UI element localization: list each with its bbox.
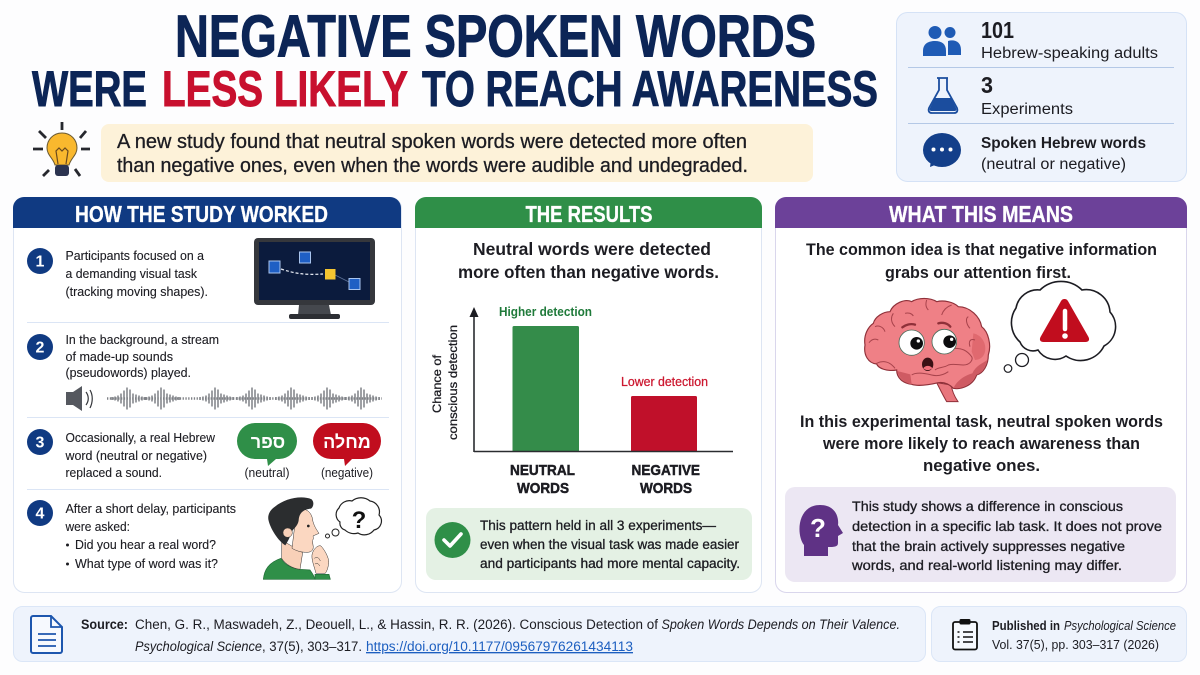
stat: experiments: [981, 72, 1073, 118]
icon: cartoon brain: [865, 298, 990, 402]
icon: document: [31, 616, 62, 653]
step 1: a demanding visual task: [66, 266, 197, 281]
step 2: of made-up sounds: [66, 349, 173, 364]
step 2: 2: [36, 340, 45, 356]
callout: replication: This pattern held in all 3 experiments—: [480, 518, 716, 533]
icon: speech bubble: [923, 133, 961, 167]
icon: thinking person: [263, 497, 330, 579]
experimental finding statement: [800, 413, 1163, 475]
title: [32, 4, 878, 117]
bar labels: NEUTRAL: [510, 462, 575, 479]
step 2: [27, 332, 382, 411]
step 1: [27, 238, 375, 319]
stat: experiments: Experiments: [981, 101, 1073, 118]
icon: head with question mark: [799, 505, 843, 556]
y axis title: Chance of: [430, 354, 444, 413]
bar labels: WORDS: [517, 480, 569, 497]
citation text: https://doi.org/10.1177/09567976261434113: [366, 639, 633, 654]
common idea statement: The common idea is that negative information: [806, 241, 1157, 259]
common idea statement: grabs our attention first.: [885, 264, 1071, 282]
icon: check mark: [434, 522, 470, 558]
step 3: word (neutral or negative): [65, 448, 207, 463]
icon: flask: [929, 78, 957, 113]
heading: the results: [415, 197, 762, 228]
negative word bubble: [313, 423, 381, 480]
neutral word bubble: ספר: [251, 432, 285, 452]
citation text: Spoken Words Depends on Their Valence.: [662, 617, 900, 632]
stat: participants: Hebrew-speaking adults: [981, 45, 1158, 62]
heading: what this means: [775, 197, 1187, 228]
citation text: [81, 617, 900, 654]
stat: experiments: 3: [981, 72, 993, 98]
bar labels: NEGATIVE: [632, 462, 700, 479]
heading: how the study worked: HOW THE STUDY WORKED: [75, 201, 328, 227]
citation text: Source:: [81, 617, 128, 632]
callout: caveat: that the brain actively suppresses negative: [852, 538, 1125, 554]
callout: caveat: words, and real-world listening may differ.: [851, 557, 1122, 573]
callout: summary: [101, 124, 813, 182]
axis arrow: [470, 307, 478, 317]
callout: replication: [426, 508, 752, 580]
step 1: (tracking moving shapes).: [66, 284, 208, 299]
publication text: Vol. 37(5), pp. 303–317 (2026): [992, 638, 1159, 652]
callout: summary: than negative ones, even when the words were audible and undegraded.: [117, 155, 748, 177]
step 4: [27, 497, 381, 579]
y axis title: conscious detection: [446, 325, 460, 440]
icon: clipboard: [953, 619, 977, 650]
waveform: [107, 388, 382, 410]
publication text: Psychological Science: [1064, 619, 1176, 633]
bar labels: WORDS: [640, 480, 692, 497]
neutral bar: Higher detection: [499, 305, 592, 319]
publication text: [992, 619, 1176, 652]
callout: caveat: [785, 487, 1176, 582]
icon: monitor with tracking task: [254, 238, 375, 319]
step 4: 4: [36, 506, 45, 522]
panel: the results: [415, 197, 762, 592]
panel: how the study worked: [13, 197, 402, 592]
icon: thought bubble with warning: [1004, 281, 1116, 372]
citation text: Psychological Science: [135, 639, 262, 654]
step 1: Participants focused on a: [66, 248, 205, 263]
heading: how the study worked: [13, 197, 401, 228]
step 4: After a short delay, participants: [66, 501, 236, 516]
negative word bubble: (negative): [321, 466, 373, 480]
step 3: Occasionally, a real Hebrew: [66, 430, 216, 445]
experimental finding statement: In this experimental task, neutral spoken words: [800, 413, 1163, 431]
step 2: In the background, a stream: [66, 332, 219, 347]
results statement: Neutral words were detected: [473, 239, 711, 259]
callout: caveat: detection in a specific lab task. It does not prove: [852, 518, 1162, 534]
callout: replication: and participants had more mental capacity.: [480, 556, 740, 571]
negative bar: [621, 375, 708, 452]
citation text: Chen, G. R., Maswadeh, Z., Deouell, L., & Hassin, R. R. (2026). Conscious Detection of: [135, 617, 658, 632]
icon: speaker: [66, 386, 92, 411]
experimental finding statement: negative ones.: [923, 457, 1040, 475]
stat: stimuli: (neutral or negative): [981, 156, 1126, 173]
bar chart: [430, 305, 733, 497]
title: TO REACH AWARENESS: [422, 61, 878, 117]
step 4: What type of word was it?: [75, 556, 218, 571]
stat: stimuli: Spoken Hebrew words: [981, 135, 1146, 152]
icon: thought bubble with question mark: [326, 498, 381, 538]
icon: thought bubble with question mark: ?: [352, 507, 366, 534]
neutral word bubble: (neutral): [244, 466, 290, 480]
negative word bubble: מחלה: [323, 432, 371, 452]
step 1: 1: [36, 254, 45, 270]
icon: head with question mark: ?: [810, 513, 826, 543]
common idea statement: [806, 241, 1157, 282]
panel: what this means: [775, 197, 1187, 592]
panel: study facts: [896, 12, 1186, 182]
step 4: Did you hear a real word?: [75, 537, 216, 552]
callout: caveat: This study shows a difference in conscious: [852, 498, 1123, 514]
neutral bar: [499, 305, 592, 452]
stat: participants: 101: [981, 17, 1014, 43]
stat: participants: [981, 17, 1158, 62]
stat: stimuli: [981, 135, 1146, 173]
negative bar: Lower detection: [621, 375, 708, 389]
step 3: replaced a sound.: [66, 465, 162, 480]
publication text: Published in: [992, 619, 1060, 633]
y axis title: [430, 325, 460, 440]
results statement: [458, 239, 719, 282]
callout: replication: even when the visual task was made easier: [480, 537, 740, 552]
experimental finding statement: were more likely to reach awareness than: [822, 435, 1140, 453]
panel: publication: [932, 606, 1186, 662]
bar labels: [510, 462, 700, 497]
icon: people: [923, 26, 961, 56]
title: LESS LIKELY: [162, 61, 408, 117]
panel: source: [14, 606, 926, 662]
neutral word bubble: [237, 423, 297, 480]
heading: the results: THE RESULTS: [526, 201, 652, 227]
step 3: [27, 423, 381, 480]
step 2: (pseudowords) played.: [66, 365, 191, 380]
icon: light bulb: [33, 122, 90, 176]
results statement: more often than negative words.: [458, 262, 719, 282]
step 3: 3: [36, 434, 45, 452]
title: WERE: [32, 61, 147, 117]
heading: what this means: WHAT THIS MEANS: [889, 201, 1073, 227]
title: NEGATIVE SPOKEN WORDS: [175, 4, 816, 70]
step 4: were asked:: [65, 519, 130, 534]
callout: summary: A new study found that neutral spoken words were detected more often: [117, 131, 747, 153]
citation text: , 37(5), 303–317.: [262, 639, 362, 654]
